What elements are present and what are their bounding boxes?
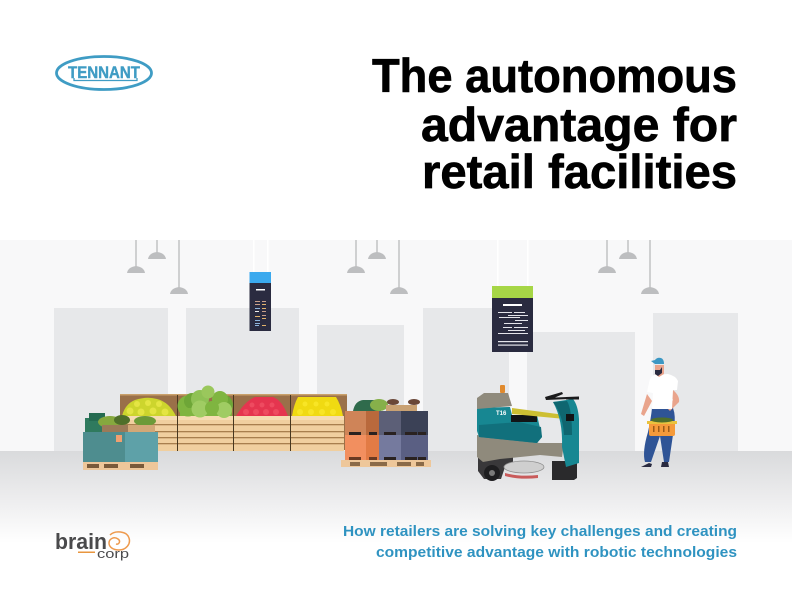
front foot xyxy=(552,461,577,480)
subtitle xyxy=(343,524,737,561)
red tomatoes xyxy=(236,397,288,416)
logo: Brain Corp: brain xyxy=(55,529,107,554)
logo: Tennant: TENNANT xyxy=(68,64,140,82)
ceiling lamps xyxy=(127,240,659,294)
logo: Tennant xyxy=(56,56,152,90)
wall panels xyxy=(54,308,738,451)
robotic floor scrubber: T16 xyxy=(496,411,507,417)
scrub deck xyxy=(504,461,544,473)
title: The autonomous xyxy=(372,49,737,102)
subtitle: How retailers are solving key challenges and creating xyxy=(343,524,737,540)
left teal pallet xyxy=(83,413,158,470)
right stacked pallets xyxy=(341,399,431,467)
legs xyxy=(644,408,675,462)
produce crates xyxy=(120,386,347,451)
hanging sign: green xyxy=(492,240,533,352)
rear wheel xyxy=(484,465,500,481)
floor xyxy=(0,451,792,543)
teal body xyxy=(477,407,542,443)
yellow lemons xyxy=(292,397,343,416)
seat cutout xyxy=(511,415,537,422)
shirt xyxy=(647,374,678,409)
store back wall xyxy=(0,240,792,452)
roof xyxy=(477,393,512,409)
grey body xyxy=(477,435,564,462)
robotic floor scrubber xyxy=(477,385,579,481)
arms xyxy=(641,394,652,416)
title: retail facilities xyxy=(422,145,737,198)
shopper with basket xyxy=(641,358,679,467)
yellow bar xyxy=(512,408,565,419)
crate fronts xyxy=(122,395,344,451)
head xyxy=(655,365,664,377)
console column xyxy=(553,399,579,467)
subtitle: competitive advantage with robotic technologies xyxy=(376,545,737,561)
dark chassis xyxy=(478,455,513,479)
steering wheel xyxy=(545,392,569,400)
hanging sign: blue xyxy=(250,240,271,331)
green cabbages xyxy=(178,386,233,418)
logo: Brain Corp: corp xyxy=(97,546,129,561)
logo: Brain Corp xyxy=(55,529,129,561)
yellow-green pears xyxy=(122,398,176,416)
title xyxy=(372,49,737,198)
basket xyxy=(649,421,675,436)
title: advantage for xyxy=(421,98,737,151)
